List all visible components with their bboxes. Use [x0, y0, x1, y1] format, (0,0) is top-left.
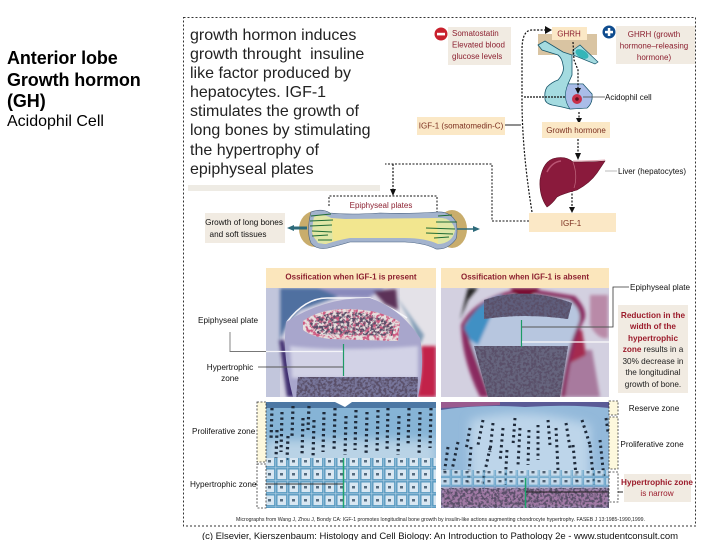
leader lines: left labels: [230, 332, 266, 367]
micrograph: growth plate without IGF-1: [441, 402, 609, 508]
label: liver: Liver (hepatocytes): [618, 167, 686, 176]
label: growth of long bones: [205, 213, 285, 243]
callout: reduction in hypertrophic zone: Reduction in the: [621, 311, 686, 320]
callout: inhibitors: [434, 27, 511, 65]
title: anterior lobe: (GH): [7, 91, 46, 111]
callout: reduction in hypertrophic zone: growth of bone.: [625, 380, 681, 389]
title: anterior lobe: Growth hormon: [7, 70, 141, 90]
heading: IGF-1 present: [266, 268, 436, 288]
callout: reduction in hypertrophic zone: hypertrophic: [628, 334, 678, 343]
callout: GHRH stimulator: hormone): [637, 53, 671, 62]
label: epiphyseal plate right: Epiphyseal plate: [630, 283, 691, 292]
label: GHRH: [552, 27, 587, 40]
leader line: hypertrophic zone narrow: [609, 491, 623, 493]
label: IGF-1 somatomedin: IGF-1 (somatomedin-C): [419, 122, 504, 130]
text block: growth hormone description: [190, 27, 371, 178]
callout: inhibitors: Somatostatin: [452, 29, 499, 38]
micrograph: epiphysis without IGF-1: [441, 288, 609, 397]
leader line: epiphyseal plate right: [609, 287, 629, 327]
icon: minus: [434, 28, 448, 40]
bracket: left zones: [257, 402, 266, 508]
label: proliferative zone left: Proliferative zone: [192, 427, 256, 436]
callout: reduction in hypertrophic zone: [618, 305, 688, 393]
label: epiphyseal plate left: Epiphyseal plate: [198, 316, 259, 325]
label: IGF-1: [529, 213, 616, 232]
text block: growth hormone description: like factor produced by: [190, 65, 351, 82]
heading: IGF-1 absent: Ossification when IGF-1 is absent: [461, 272, 589, 282]
micrograph: growth plate with IGF-1: [266, 402, 436, 508]
callout: inhibitors: Elevated blood: [452, 40, 505, 50]
label: growth hormone: Growth hormone: [546, 126, 606, 135]
label: hypertrophic zone upper: Hypertrophic: [207, 363, 253, 372]
callout: GHRH stimulator: [602, 26, 695, 64]
callout: GHRH stimulator: hormone–releasing: [620, 42, 688, 50]
arrow: left growth: [287, 225, 307, 231]
label: growth hormone: [542, 122, 610, 138]
heading: IGF-1 absent: [441, 268, 609, 288]
text block: growth hormone description: long bones by stimulating: [190, 122, 371, 139]
long bone illustration: [299, 210, 467, 249]
label: GHRH: GHRH: [557, 30, 581, 38]
title: anterior lobe: Anterior lobe: [7, 48, 118, 68]
callout: hypertrophic zone narrow: Hypertrophic zone: [621, 478, 693, 487]
label: IGF-1 somatomedin: [417, 117, 505, 135]
text block: growth hormone description: the hypertrophy of: [190, 142, 319, 159]
text block: growth hormone description: epiphyseal plates: [190, 161, 314, 178]
label: acidophil cell: Acidophil cell: [605, 93, 652, 102]
label: hypertrophic zone upper: [207, 363, 253, 383]
label: epiphyseal plates: Epiphyseal plates: [350, 201, 412, 210]
full figure: growth hormone diagram: [183, 17, 696, 540]
leader line: hypertrophic zone lower: [255, 483, 266, 485]
dotted feedback pathways: [329, 30, 617, 221]
label: hypertrophic zone upper: zone: [221, 374, 239, 383]
text block: growth hormone description: stimulates the growth of: [190, 103, 359, 120]
text block: growth hormone description: hepatocytes. IGF-1: [190, 84, 326, 101]
callout: hypertrophic zone narrow: is narrow: [640, 489, 674, 498]
text block: growth hormone description: growth hormon induces: [190, 27, 356, 44]
callout: inhibitors: glucose levels: [452, 52, 502, 61]
dashed figure frame: [184, 18, 696, 526]
callout: GHRH stimulator: GHRH (growth: [628, 30, 680, 39]
subtitle: acidophil cell: Acidophil Cell: [7, 113, 104, 130]
icon: plus: [602, 26, 616, 38]
label: growth of long bones: and soft tissues: [210, 230, 266, 239]
text block: growth hormone description: growth throught insuline: [190, 46, 364, 63]
callout: hypertrophic zone narrow: [621, 474, 693, 502]
label: hypertrophic zone lower: Hypertrophic zone: [190, 480, 257, 489]
arrowheads: [390, 26, 582, 213]
callout: reduction in hypertrophic zone: 30% decrease in: [622, 357, 684, 366]
citation: micrographs source: Micrographs from Wang J, Zhou J, Bondy CA: IGF-1 promotes longitudinal bone growth by insulin-like actions augmenting chondrocyte hypertrophy. FASEB J 13:1985-1990,1999.: [236, 517, 645, 523]
label: reserve zone: Reserve zone: [629, 404, 680, 413]
beige strip under text: [188, 185, 380, 191]
heading: IGF-1 present: Ossification when IGF-1 is present: [285, 272, 417, 282]
label: IGF-1: IGF-1: [561, 219, 582, 228]
callout: reduction in hypertrophic zone: the longitudinal: [625, 368, 681, 377]
micrograph: epiphysis with IGF-1: [266, 288, 436, 397]
pituitary illustration: [538, 34, 598, 109]
label: growth of long bones: Growth of long bones: [205, 218, 283, 227]
title: anterior lobe: [7, 48, 141, 111]
callout: reduction in hypertrophic zone: zone results in a: [623, 345, 684, 354]
icon: liver: [540, 158, 605, 207]
white text backing box: [184, 18, 385, 185]
bracket: right zones: [609, 401, 618, 502]
label: proliferative zone right: Proliferative zone: [620, 440, 684, 449]
callout: reduction in hypertrophic zone: width of the: [629, 322, 676, 331]
arrow: right growth: [457, 226, 480, 232]
